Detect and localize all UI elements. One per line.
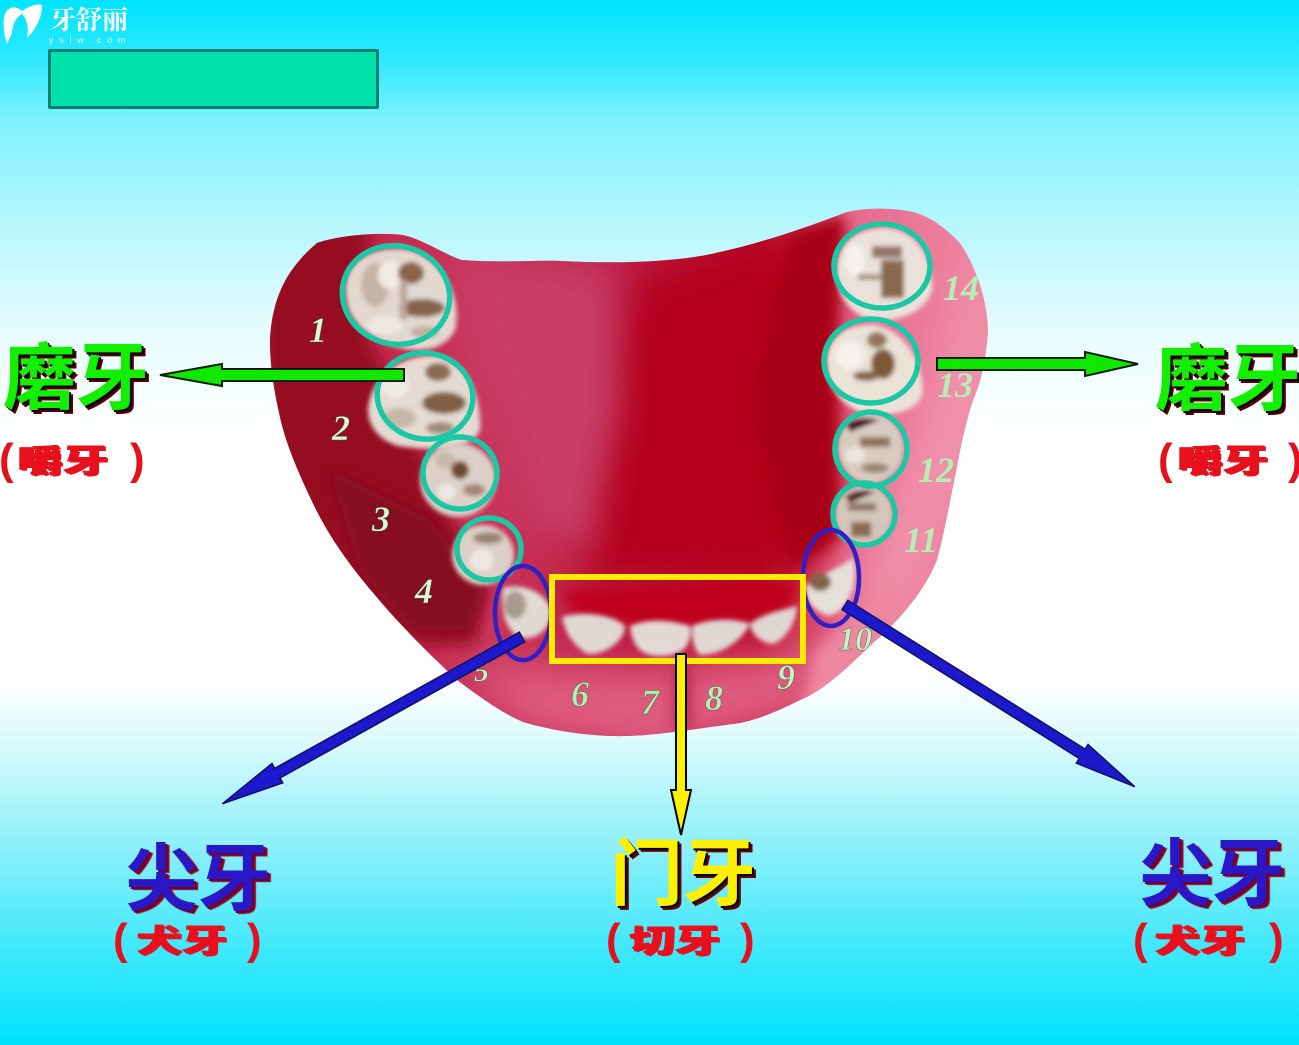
sublabel: left canine: ) [247,915,262,964]
label: left canine: 尖牙 [125,839,271,920]
sublabel: right canine: ( [1133,915,1148,964]
label: left molar: 磨牙 [3,338,149,419]
tooth: molar 12 [837,413,903,483]
tooth: molar 13 [826,325,922,415]
tooth: left canine [502,586,551,638]
tooth numbers: 2 [331,408,350,448]
tooth numbers: 1 [309,310,327,350]
tooth numbers: 9 [777,657,795,697]
tooth numbers: 11 [904,520,938,560]
tooth numbers: 5 [474,655,489,688]
label: right canine: 尖牙 [1139,834,1285,915]
sublabel: left molar: ) [130,435,145,484]
label: right molar: 磨牙 [1155,339,1299,420]
sublabel: right canine [1133,915,1284,964]
sublabel: left canine: ( [113,915,128,964]
tooth numbers: 10 [838,621,872,658]
molar circles [331,224,930,580]
tooth numbers: 3 [371,499,390,539]
logo tooth icon [4,4,42,44]
sublabel: incisor: ) [740,915,755,964]
blank green title box [48,49,379,109]
tooth: molar 11 [834,485,892,545]
arrow: right green [937,352,1138,376]
sublabel: left canine: 犬牙 [137,923,228,959]
logo wordmark: 牙舒丽 [50,6,128,35]
tooth: right canine [806,558,855,615]
tooth: molar 14 [836,228,932,320]
tooth: molar 1 [345,249,457,350]
logo url: yslw.com [49,35,131,45]
sublabel: incisor [606,915,755,964]
tooth: molar 4 [452,525,514,585]
tooth: molar 2 [368,356,480,449]
arrow: left blue [217,627,527,813]
tooth numbers [309,268,979,722]
sublabel: incisor: ( [606,915,621,964]
illustration: mouth, teeth, markers and arrows [4,4,1138,836]
arrow: yellow [671,654,691,835]
arrow: right blue [839,596,1141,796]
tooth: molar 3 [420,443,496,517]
mouth illustration [255,209,1000,760]
tooth numbers: 6 [571,674,589,714]
tooth: incisors [562,606,797,656]
sublabel: left canine [113,915,262,964]
tooth numbers: 13 [937,365,973,405]
sublabel: left molar: 嚼牙 [18,443,109,479]
sublabel: right molar [1158,435,1299,484]
incisor box [552,577,803,661]
teeth [345,228,932,656]
tooth numbers: 4 [414,571,433,611]
sublabel: incisor: 切牙 [630,923,721,959]
sublabel: right molar: 嚼牙 [1178,443,1269,479]
label: incisor: 门牙 [610,834,756,915]
sublabel: left molar [0,435,145,484]
sublabel: right molar: ( [1158,435,1173,484]
tooth numbers: 7 [641,682,661,722]
tooth numbers: 14 [943,268,979,308]
sublabel: right canine: ) [1269,915,1284,964]
sublabel: right canine: 犬牙 [1155,923,1246,959]
tooth numbers: 8 [705,678,723,718]
arrow: left green [160,364,404,386]
canine ovals [495,530,859,660]
tooth numbers: 12 [918,450,954,490]
